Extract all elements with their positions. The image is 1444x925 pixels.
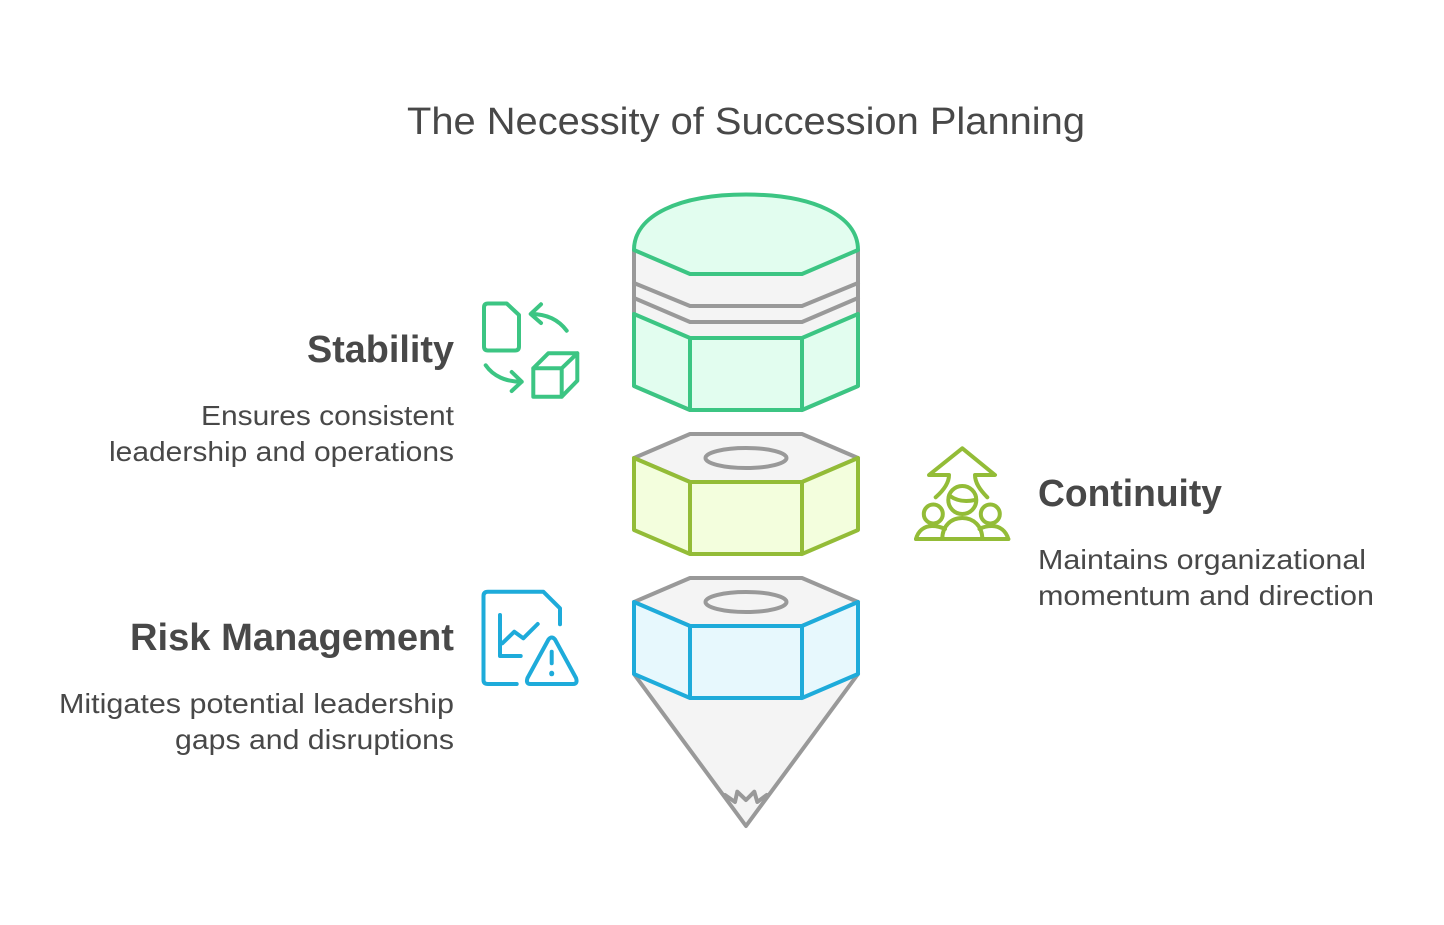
text: Risk Management description: gaps and disruptions <box>175 724 454 755</box>
icon: people with upward arrow <box>916 448 1008 539</box>
heading: Stability: Stability <box>307 329 454 371</box>
text: Continuity description: Maintains organizational <box>1038 544 1366 575</box>
segment: lower blue hexagon <box>634 578 858 698</box>
segment: top green dome with grey bands <box>634 194 858 410</box>
heading: Risk Management: Risk Management <box>130 617 454 659</box>
text: Risk Management description: Mitigates potential leadership <box>59 688 454 719</box>
segment: middle lime hexagon <box>634 434 858 554</box>
text: Risk Management description <box>59 688 454 755</box>
text: Stability description: Ensures consistent <box>201 400 454 431</box>
text: Continuity description: momentum and direction <box>1038 580 1374 611</box>
text: Continuity description <box>1038 544 1374 611</box>
title: The Necessity of Succession Planning <box>407 101 1085 143</box>
segment: lower tip cone <box>634 674 858 826</box>
heading: Continuity: Continuity <box>1038 473 1222 515</box>
stacked hexagonal pencil diagram <box>634 194 858 826</box>
icon: document and cube exchange <box>484 304 577 397</box>
icon: chart document with warning <box>484 592 577 684</box>
text: Stability description <box>109 400 454 467</box>
text: Stability description: leadership and operations <box>109 436 454 467</box>
